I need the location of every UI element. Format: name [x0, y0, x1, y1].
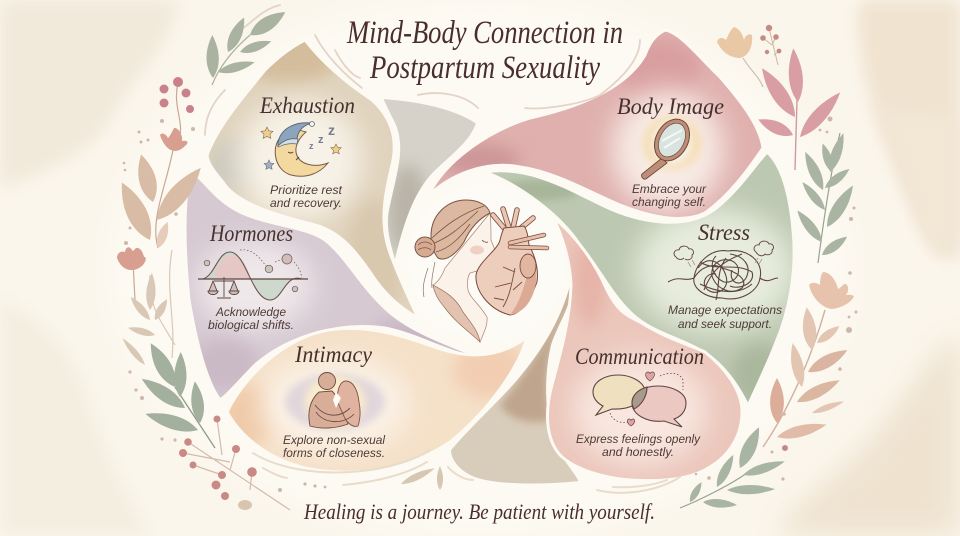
botanical: lower-left green branch [138, 340, 215, 448]
text: Exhaustion advice: Prioritize rest [270, 185, 343, 197]
icon: upper tulip [160, 128, 188, 151]
text: Communication advice: Express feelings openly [576, 434, 701, 446]
panel: communication [546, 223, 740, 480]
icon: hand mirror [642, 113, 702, 179]
panel: brown accent shape [451, 288, 578, 484]
botanical: bottom-left red berries [179, 416, 290, 510]
botanical: left tan branch with berries and tulips [113, 77, 208, 300]
text: Exhaustion advice [270, 185, 343, 210]
heading: Communication: Communication [575, 344, 704, 369]
decorative title flourishes [205, 5, 640, 135]
panel: grey accent shape [384, 99, 476, 259]
text: Communication advice [576, 434, 701, 459]
icon: embracing couple [285, 372, 385, 430]
botanical: top-left green sprig [206, 6, 289, 85]
icon: tangled thread and steam clouds [668, 241, 778, 300]
icon: top-right peach tulip [717, 27, 763, 87]
icon: lower-right flower [809, 272, 854, 309]
text: Body Image advice: Embrace your [632, 184, 707, 196]
text: Hormones advice [208, 307, 294, 332]
heading: Body Image: Body Image [617, 94, 724, 119]
text: Intimacy advice: Explore non-sexual [283, 435, 385, 447]
text: Stress advice: Manage expectations [668, 305, 782, 317]
icon: anatomical heart [476, 209, 547, 315]
text: Hormones advice: biological shifts. [208, 320, 294, 332]
heading: Hormones: Hormones [209, 221, 293, 246]
footer message: Healing is a journey. Be patient with yourself. [303, 499, 655, 524]
title: Postpartum Sexuality [369, 50, 600, 86]
text: Stress advice: and seek support. [678, 319, 772, 331]
heading: Intimacy: Intimacy [294, 342, 373, 367]
icon: sleeping moon with nightcap: z [328, 122, 335, 138]
botanical: bottom-right green sprig [680, 424, 786, 509]
text: Intimacy advice: forms of closeness. [283, 448, 385, 460]
title: Mind-Body Connection in [346, 15, 623, 51]
botanical: lower-left tan sprigs [120, 250, 175, 367]
icon: woman in profile [415, 200, 495, 342]
panel: intimacy [228, 328, 524, 471]
icon: hormone wave and scales [198, 250, 308, 300]
botanical: bottom-centre small leaves [400, 465, 443, 490]
text: Hormones advice: Acknowledge [215, 307, 286, 319]
title [346, 15, 623, 86]
text: Body Image advice [632, 184, 707, 209]
heading: Stress: Stress [698, 220, 750, 245]
botanical: upper-right pink branch [756, 25, 845, 170]
central white circle with woman and heart [409, 184, 565, 342]
icon: sleeping moon with nightcap: z [318, 134, 324, 146]
decorative bottom swirls [253, 450, 680, 493]
icon: overlapping speech bubbles [593, 372, 686, 427]
panel: hormones [186, 172, 465, 398]
text: Body Image advice: changing self. [632, 197, 706, 209]
panel: exhaustion [208, 42, 414, 314]
text: Communication advice: and honestly. [602, 447, 674, 459]
icon: sleeping moon with nightcap [261, 122, 341, 176]
text: Intimacy advice [283, 435, 385, 460]
text: Stress advice [668, 305, 782, 331]
icon: sleeping moon with nightcap: z [309, 141, 314, 151]
panel: stress [480, 150, 800, 410]
botanical: lower-right peach branch with flower [763, 272, 854, 447]
decorative dots [123, 116, 857, 492]
botanical: right green branch [793, 132, 858, 263]
panel: body image [433, 32, 762, 217]
icon: lower tulip [117, 247, 146, 270]
text: Exhaustion advice: and recovery. [270, 198, 342, 210]
heading: Exhaustion: Exhaustion [259, 93, 355, 118]
